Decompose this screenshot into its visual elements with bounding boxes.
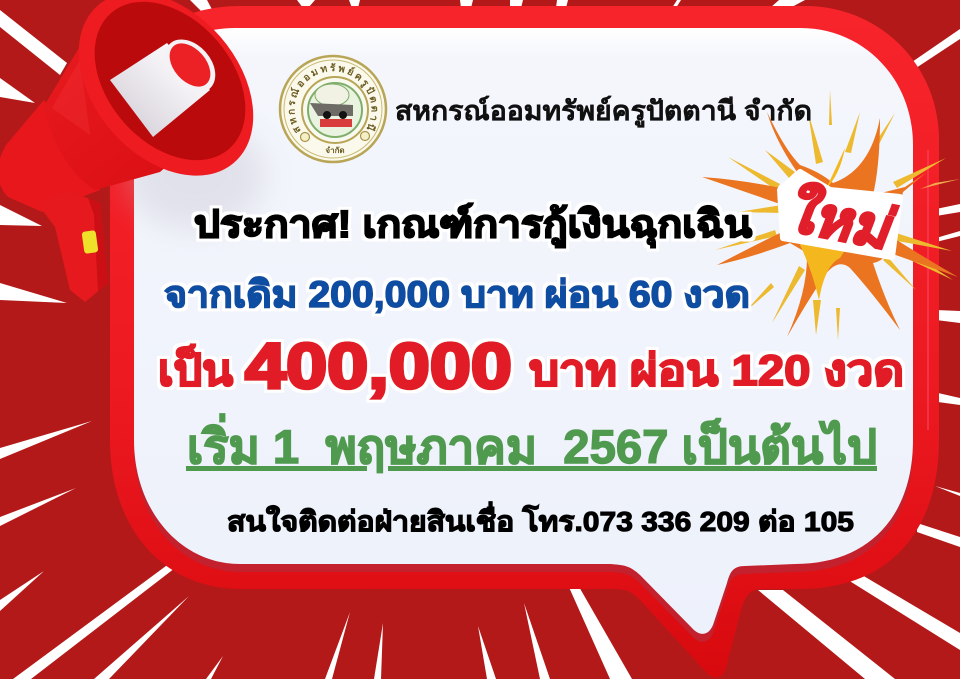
starburst behind new label (702, 90, 960, 340)
new terms: prefix: เป็น (158, 344, 234, 395)
driver cylinder (110, 43, 210, 137)
new label: ใหม่ (780, 180, 905, 260)
contact line: สนใจติดต่อฝ่ายสินเชื่อ โทร.073 336 209 ต่อ 105 (227, 501, 854, 537)
emblem centre art (310, 84, 353, 127)
announcement heading: ประกาศ! เกณฑ์การกู้เงินฉุกเฉิน (194, 203, 752, 248)
emblem seal left (300, 132, 310, 142)
burst spikes yellow (715, 90, 960, 340)
bell mouth (64, 0, 276, 190)
new terms: instalments: บาท ผ่อน 120 งวด (529, 347, 904, 395)
megaphone shadow on panel (125, 120, 265, 230)
emblem ring text: สหกรณ์ออมทรัพย์ครูปัตตานี (288, 63, 378, 134)
previous terms: จากเดิม 200,000 บาท ผ่อน 60 งวด (164, 274, 750, 315)
new terms: amount: 400,000 (245, 330, 512, 402)
driver cap (154, 30, 226, 102)
megaphone body cone (44, 38, 220, 190)
megaphone handle (37, 190, 108, 302)
burst orange star (702, 112, 958, 337)
handle button (82, 230, 98, 254)
emblem seal right (360, 132, 370, 140)
burst yellow core (800, 148, 880, 300)
new terms (158, 330, 904, 402)
body highlight (52, 60, 90, 135)
megaphone (0, 0, 289, 302)
bell rim (43, 0, 289, 210)
start date: เริ่ม 1 พฤษภาคม 2567 เป็นต้นไป (187, 413, 877, 473)
cooperative emblem (278, 54, 388, 164)
bubble white panel (134, 28, 913, 634)
emblem lower text: จำกัด (325, 146, 345, 155)
organisation name: สหกรณ์ออมทรัพย์ครูปัตตานี จำกัด (395, 95, 812, 128)
megaphone rear (0, 100, 100, 212)
